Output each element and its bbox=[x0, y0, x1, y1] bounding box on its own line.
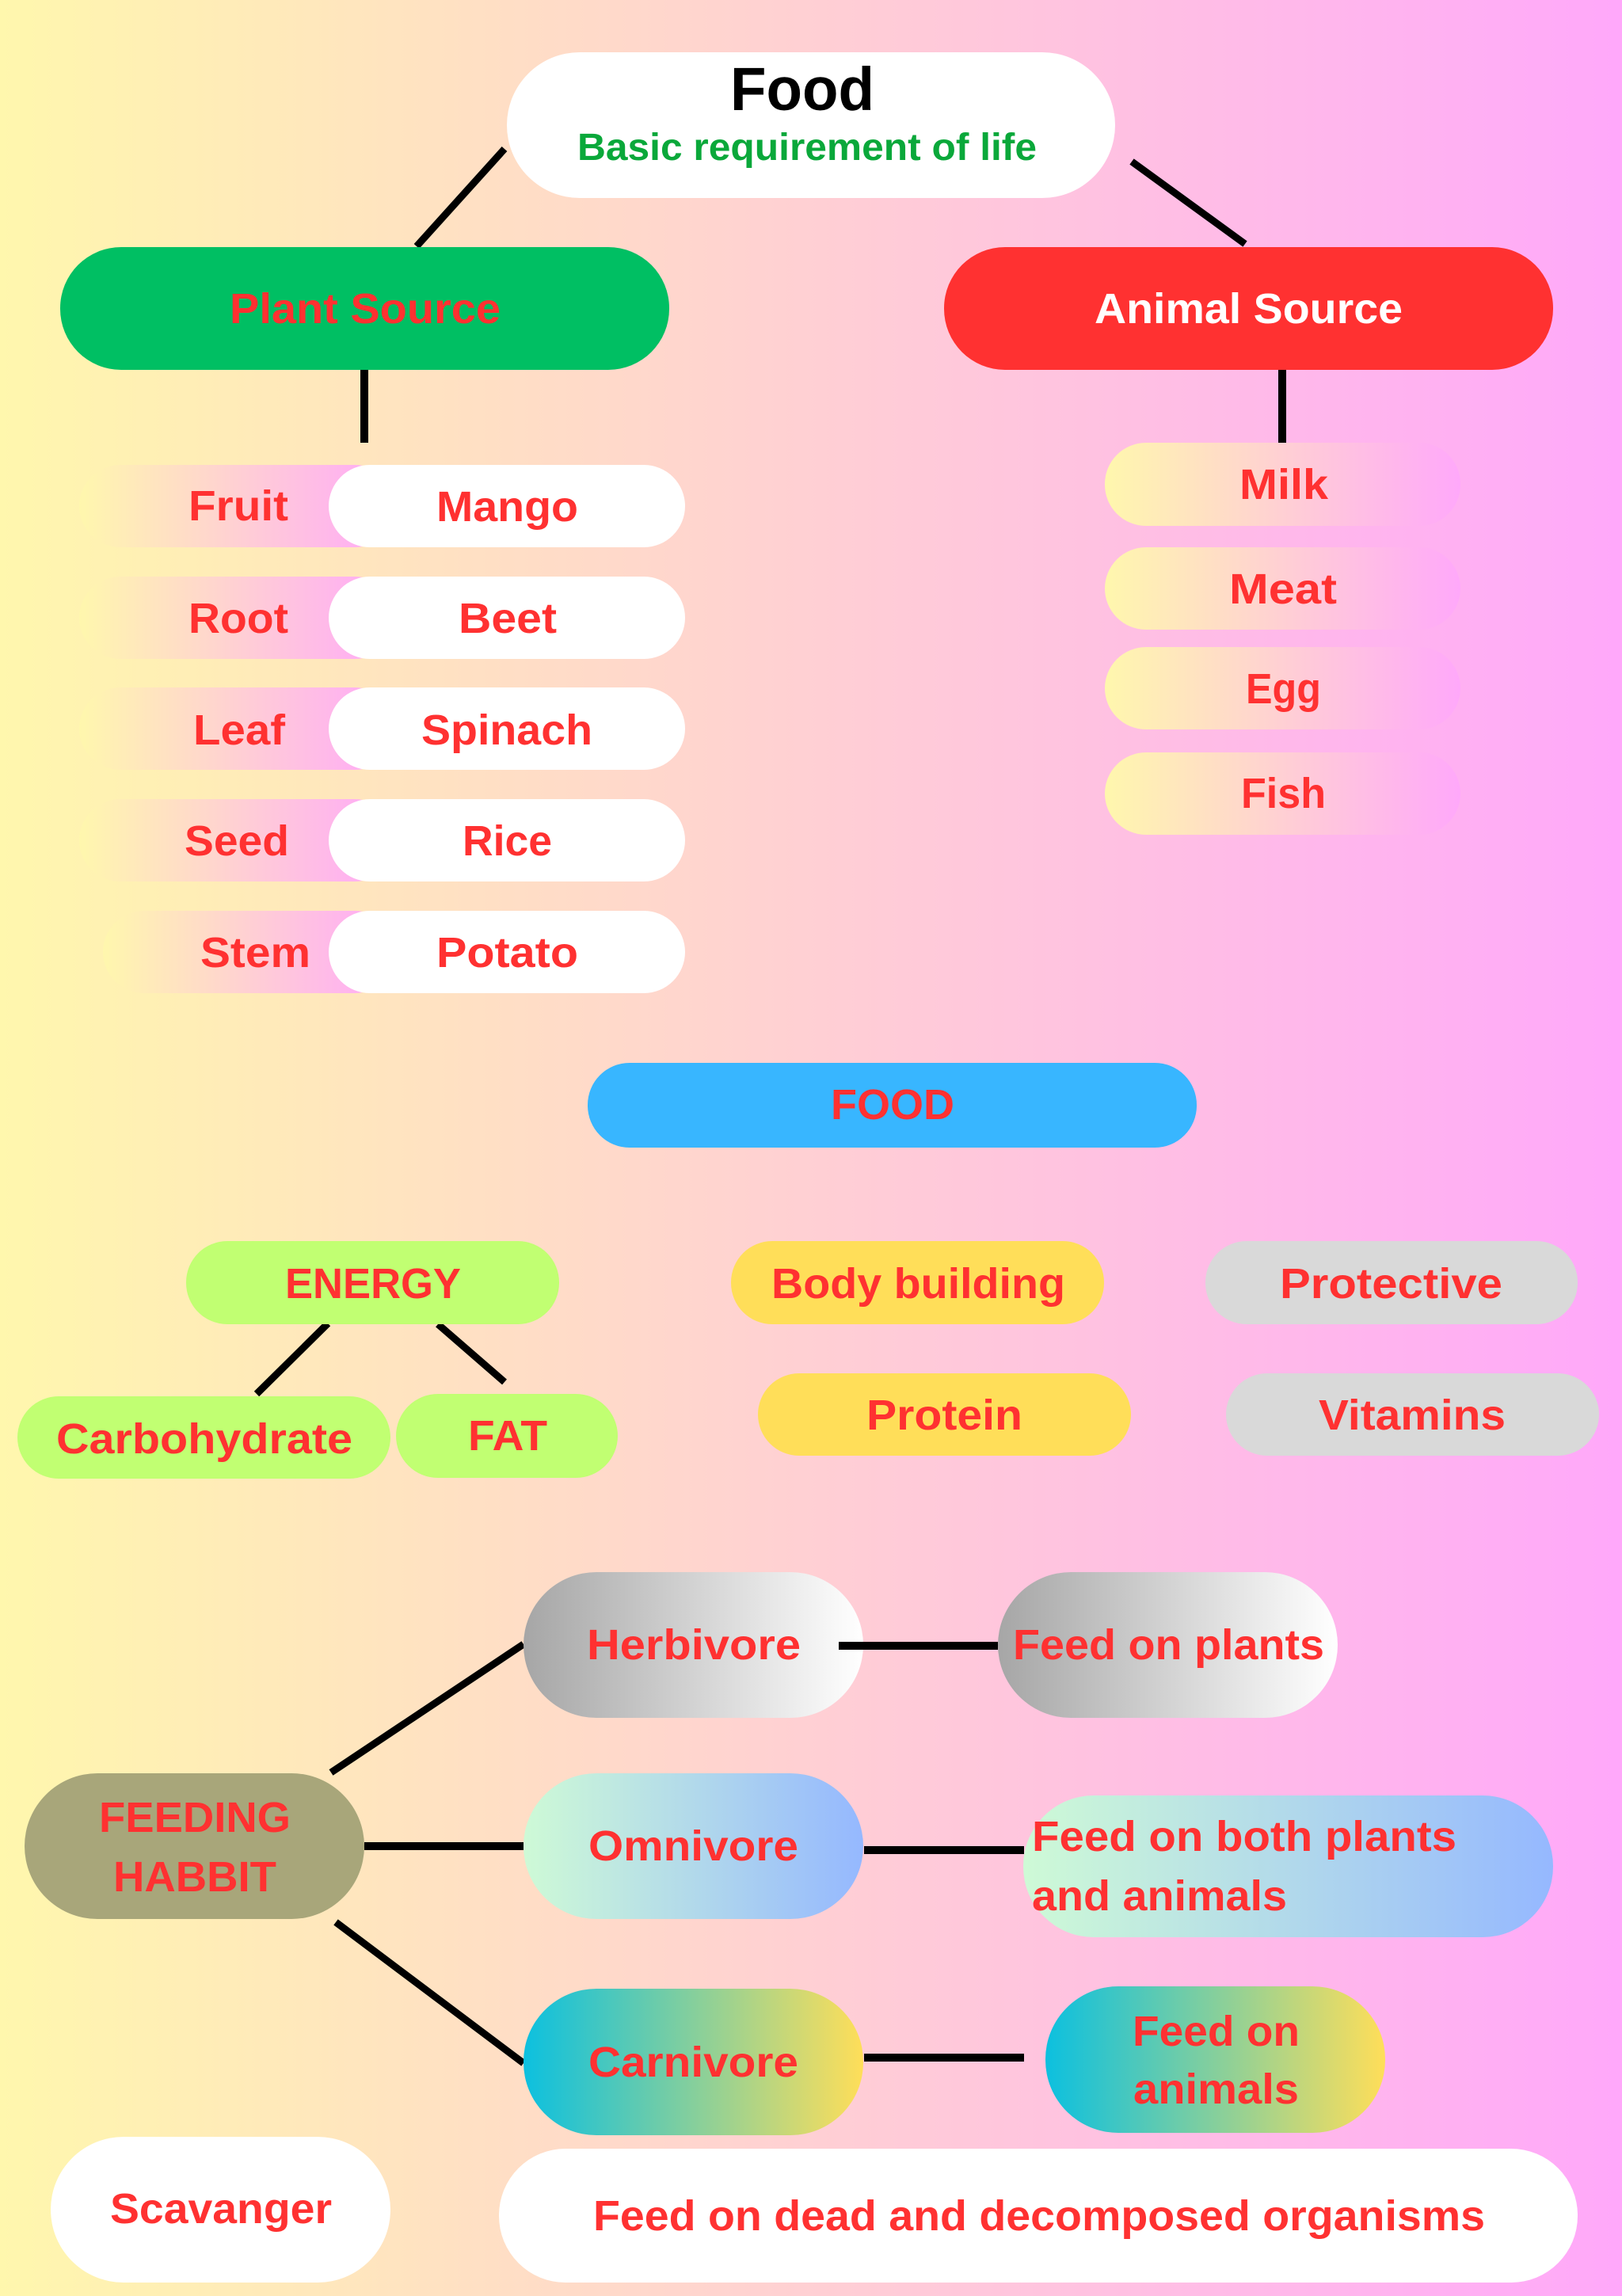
row: Fruit - Mango bbox=[79, 465, 685, 547]
connector: feeding habbit to carnivore bbox=[336, 1922, 524, 2063]
pill: Meat: Meat bbox=[1229, 565, 1337, 613]
connector: animal source to list bbox=[1278, 370, 1286, 443]
pill: Feed on animals: Feed on bbox=[1133, 2008, 1300, 2055]
row: Root - Beet bbox=[79, 577, 685, 659]
pill: Feed on animals bbox=[1045, 1986, 1385, 2133]
connector: energy to carbohydrate bbox=[257, 1323, 328, 1394]
pill: Feed on dead and decomposed organisms bbox=[499, 2149, 1578, 2283]
row: Fruit - Mango: Mango bbox=[436, 483, 578, 531]
pill: Herbivore bbox=[524, 1572, 863, 1718]
pill: Body building bbox=[731, 1241, 1104, 1324]
pill: Vitamins bbox=[1226, 1373, 1599, 1456]
pill: Omnivore bbox=[524, 1773, 863, 1919]
pill: Fish: Fish bbox=[1241, 770, 1326, 817]
pill: Feed on plants bbox=[998, 1572, 1338, 1718]
pill: Carbohydrate: Carbohydrate bbox=[56, 1415, 352, 1463]
pill: Milk: Milk bbox=[1239, 461, 1329, 508]
row: Stem - Potato: Stem bbox=[200, 929, 310, 977]
title pill: Food bbox=[507, 52, 1115, 198]
pill: FEEDING HABBIT: FEEDING bbox=[99, 1794, 291, 1841]
connector: plant source to list bbox=[360, 370, 368, 443]
pill: Carbohydrate bbox=[17, 1396, 390, 1479]
row: Fruit - Mango: Fruit bbox=[188, 482, 288, 530]
pill: FAT: FAT bbox=[468, 1412, 547, 1460]
pill: Egg bbox=[1105, 647, 1460, 729]
pill: Omnivore: Omnivore bbox=[588, 1822, 798, 1870]
heading pill: Animal Source: Animal Source bbox=[1095, 285, 1403, 333]
pill: Fish bbox=[1105, 752, 1460, 835]
row: Seed - Rice: Seed bbox=[185, 817, 289, 865]
subtitle text: Basic requirement of life bbox=[577, 127, 1037, 169]
pill: Feed on both plants and animals: Feed on both plants bbox=[1032, 1813, 1456, 1860]
row: Leaf - Spinach: Leaf bbox=[193, 706, 286, 754]
pill: Protective bbox=[1205, 1241, 1578, 1324]
row: Stem - Potato bbox=[103, 911, 685, 993]
pill: Feed on dead and decomposed organisms: Feed on dead and decomposed organisms bbox=[593, 2192, 1485, 2240]
pill: FEEDING HABBIT: HABBIT bbox=[113, 1853, 276, 1901]
pill: Milk bbox=[1105, 443, 1460, 526]
pill: Protein: Protein bbox=[866, 1392, 1022, 1439]
connector: feeding habbit to herbivore bbox=[331, 1644, 524, 1772]
pill: Feed on plants: Feed on plants bbox=[1013, 1621, 1324, 1669]
pill: Protective: Protective bbox=[1280, 1260, 1502, 1308]
heading pill: FOOD bbox=[588, 1063, 1197, 1148]
pill: FAT bbox=[396, 1394, 618, 1478]
row: Leaf - Spinach bbox=[79, 687, 685, 770]
pill: Egg: Egg bbox=[1246, 665, 1321, 713]
heading pill: FOOD: FOOD bbox=[831, 1081, 954, 1129]
row: Root - Beet: Root bbox=[188, 595, 288, 642]
pill: Feed on animals: animals bbox=[1133, 2066, 1299, 2113]
pill: Carnivore: Carnivore bbox=[588, 2039, 798, 2086]
pill: Protein bbox=[758, 1373, 1131, 1456]
row: Root - Beet: Beet bbox=[459, 595, 557, 642]
pill: FEEDING HABBIT bbox=[25, 1773, 364, 1919]
title text: Food bbox=[730, 55, 874, 124]
pill: Body building: Body building bbox=[771, 1260, 1065, 1308]
connector: herbivore to description bbox=[839, 1642, 998, 1650]
row: Stem - Potato: Potato bbox=[436, 929, 578, 977]
pill: Feed on both plants and animals: and animals bbox=[1032, 1872, 1287, 1920]
row: Leaf - Spinach: Spinach bbox=[421, 706, 592, 754]
connector: food to animal source bbox=[1132, 162, 1245, 244]
row: Seed - Rice: Rice bbox=[463, 817, 552, 865]
connector: carnivore to description bbox=[864, 2054, 1024, 2062]
pill: Feed on both plants and animals bbox=[1023, 1795, 1553, 1937]
pill: Carnivore bbox=[524, 1989, 863, 2135]
pill: Herbivore: Herbivore bbox=[587, 1621, 801, 1669]
pill: ENERGY bbox=[186, 1241, 559, 1324]
connector: feeding habbit to omnivore bbox=[364, 1842, 524, 1850]
heading pill: Plant Source bbox=[60, 247, 669, 370]
connector: energy to fat bbox=[438, 1324, 504, 1382]
row: Seed - Rice bbox=[79, 799, 685, 881]
pill: Scavanger: Scavanger bbox=[110, 2185, 332, 2233]
pill: Meat bbox=[1105, 547, 1460, 630]
connector: food to plant source bbox=[417, 149, 504, 246]
connector: omnivore to description bbox=[864, 1846, 1024, 1854]
heading pill: Animal Source bbox=[944, 247, 1553, 370]
heading pill: Plant Source: Plant Source bbox=[230, 285, 501, 333]
pill: ENERGY: ENERGY bbox=[285, 1260, 461, 1308]
pill: Scavanger bbox=[51, 2137, 390, 2283]
pill: Vitamins: Vitamins bbox=[1319, 1392, 1506, 1439]
